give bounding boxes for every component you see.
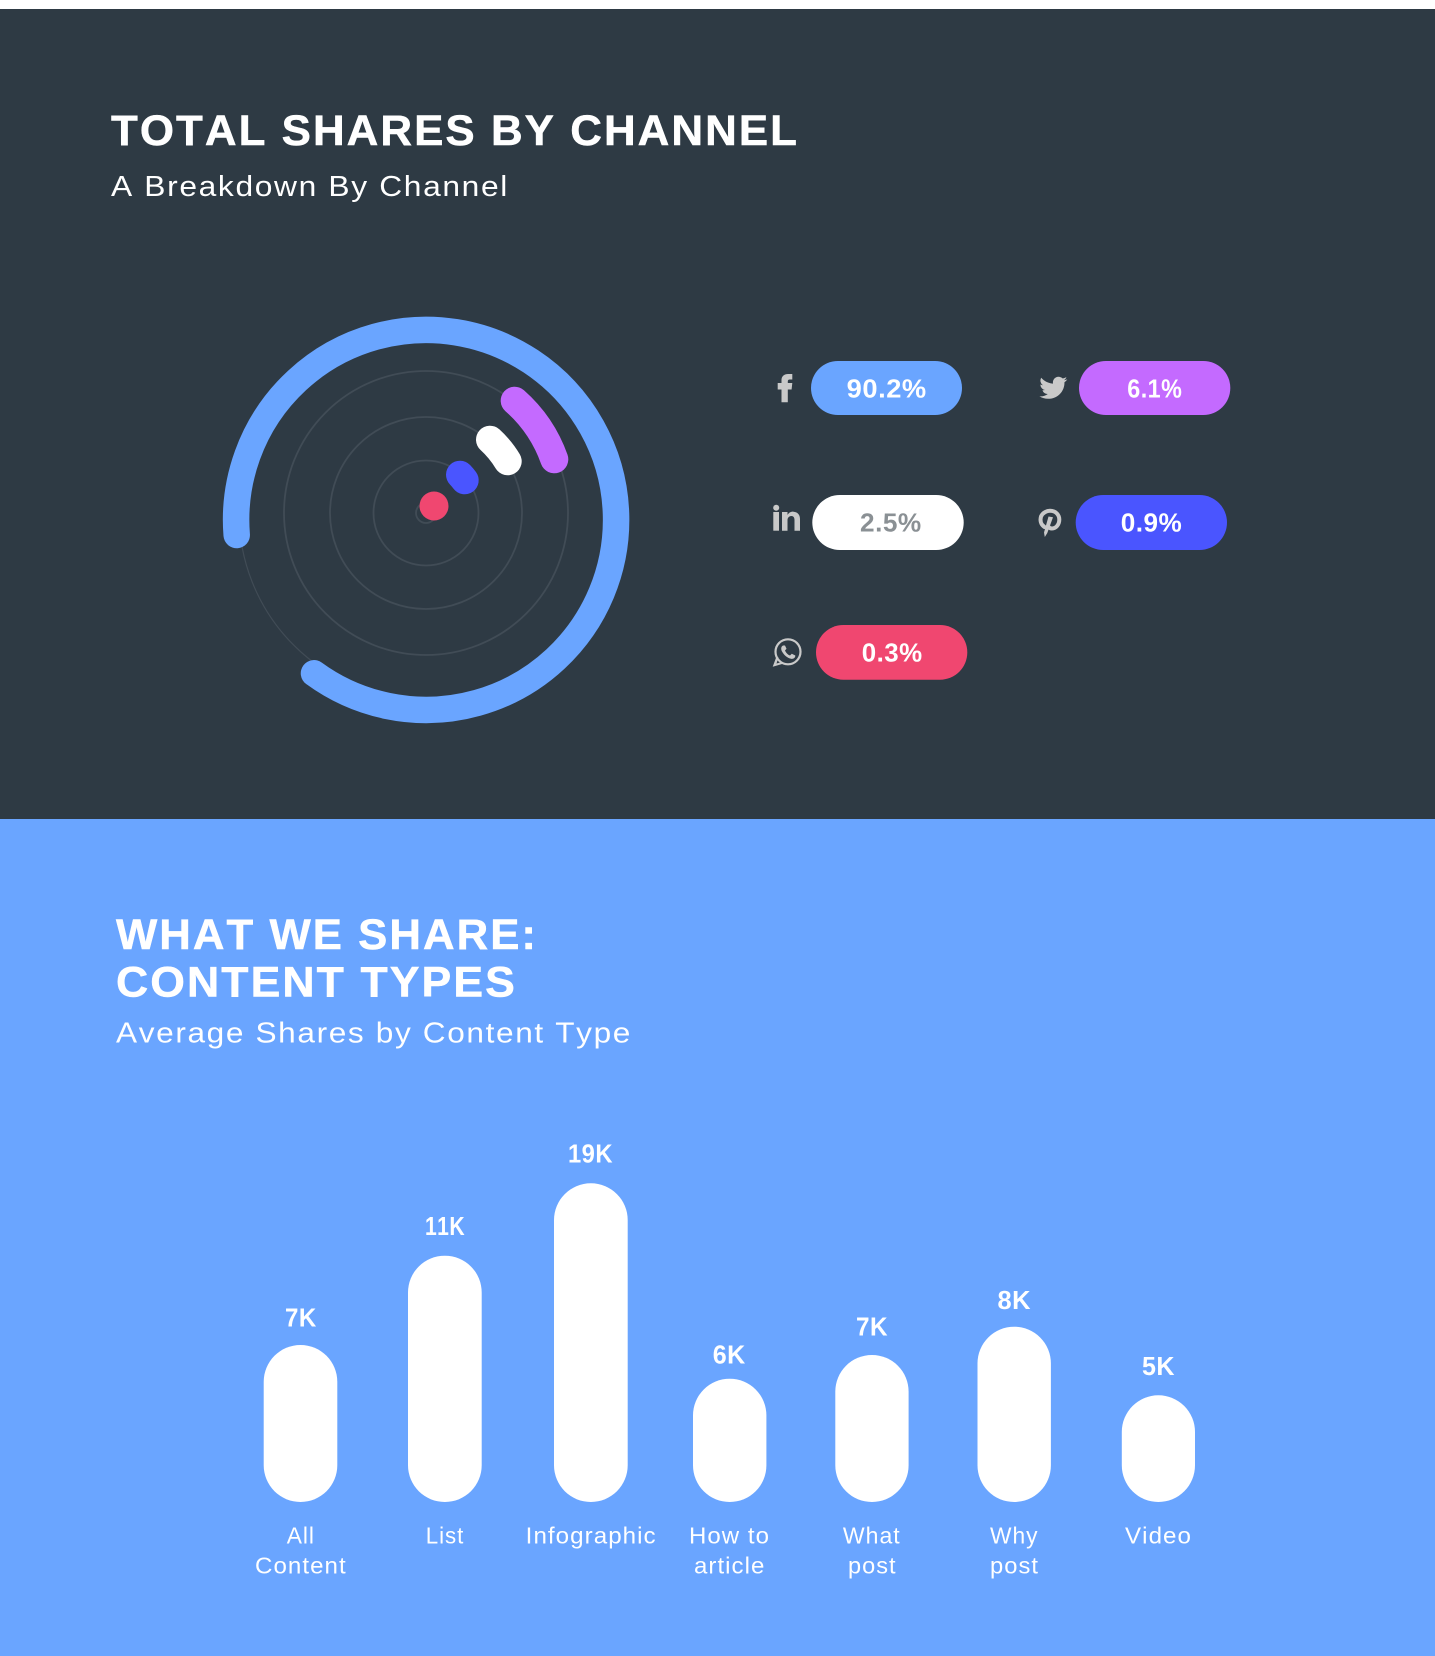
bar chart: average shares by content type [255,1141,1195,1578]
bar: why post 8K: Why [990,1522,1038,1548]
bar: what post 7K: 7K [856,1314,888,1342]
legend: linkedin [773,495,964,550]
bar: infographic 19K [526,1141,657,1548]
bar: list 11K: 11K [425,1213,465,1241]
bar: all content 7K [255,1305,347,1578]
arc: twitter 6.1% [515,401,554,459]
arc: linkedin 2.5% [490,440,508,461]
bar: what post 7K: What [843,1522,901,1548]
bar: what post 7K [835,1314,909,1578]
panel: total shares by channel [0,9,1435,819]
bar: all content 7K: Content [255,1552,347,1578]
bar: why post 8K [978,1287,1051,1578]
radial chart: shares by channel [236,326,616,710]
bar: list 11K [408,1213,482,1548]
legend: pinterest: 0.9% [1121,508,1182,538]
arc: facebook 90.2% [236,330,616,710]
heading: what we share content types: WHAT WE SHARE: [116,911,538,959]
arc: pinterest 0.9% [460,475,465,480]
legend: whatsapp: 0.3% [862,638,923,668]
subheading: a breakdown by channel: A Breakdown By Channel [111,171,509,203]
heading: total shares by channel: TOTAL SHARES BY CHANNEL [111,107,799,155]
bar: how to article 6K: How to [689,1522,770,1548]
bar: all content 7K: All [287,1522,315,1548]
legend: pinterest [1041,495,1227,550]
legend: twitter [1039,361,1230,415]
legend: facebook: 90.2% [847,373,927,403]
bar: how to article 6K [689,1341,770,1578]
bar: video 5K: 5K [1142,1353,1175,1381]
bar: list 11K: List [426,1522,464,1548]
bar: why post 8K: post [990,1552,1039,1578]
bar: all content 7K: 7K [285,1305,317,1333]
legend: whatsapp [773,625,967,680]
bar: why post 8K: 8K [998,1287,1031,1315]
bar: what post 7K: post [848,1552,897,1578]
legend: facebook [778,361,962,415]
bar: infographic 19K: Infographic [526,1522,657,1548]
panel: what we share [0,819,1435,1656]
bar: how to article 6K: article [694,1552,765,1578]
bar: video 5K: Video [1125,1522,1192,1548]
bar: infographic 19K: 19K [568,1141,613,1169]
subheading: average shares by content type: Average Shares by Content Type [116,1018,632,1050]
heading: what we share content types: CONTENT TYPES [116,958,517,1006]
bar: video 5K [1122,1353,1195,1548]
legend: twitter: 6.1% [1127,373,1182,403]
heading: what we share content types [116,911,538,1006]
dot: whatsapp 0.3% [420,492,448,520]
legend: linkedin: 2.5% [860,508,922,538]
bar: how to article 6K: 6K [713,1341,746,1369]
